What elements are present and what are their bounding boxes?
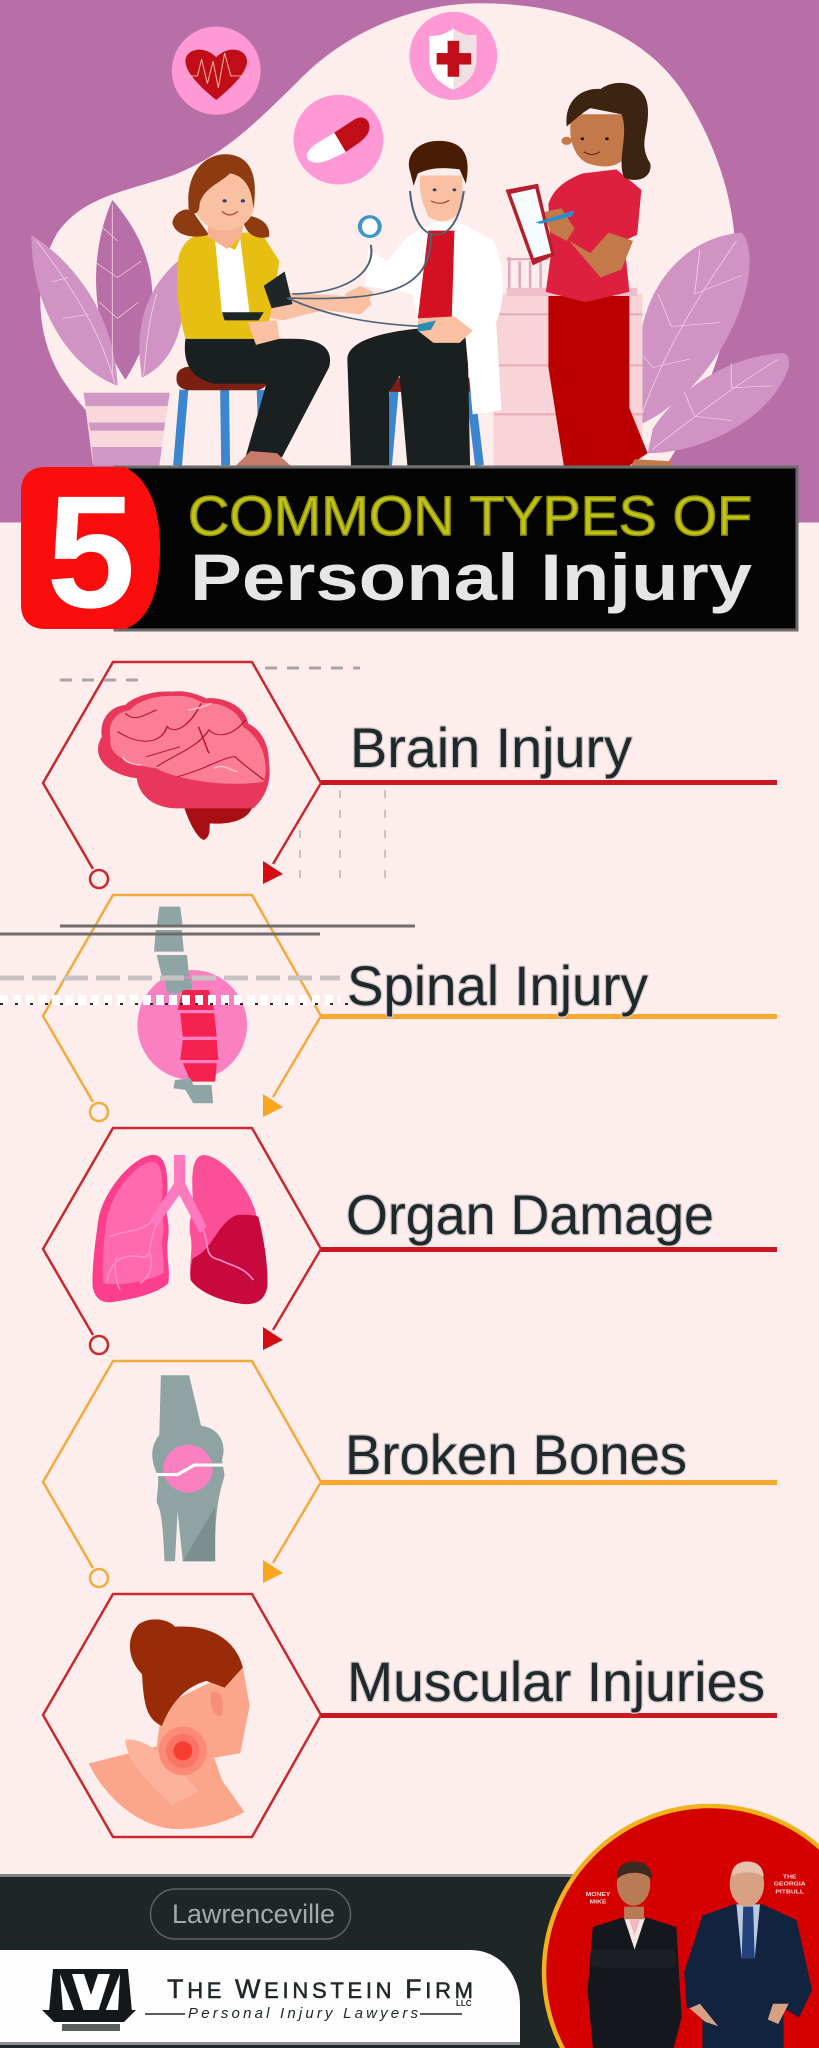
label: Organ Damage: Organ Damage [346,1183,714,1246]
icon: doctor stool [384,378,479,465]
panel: footer band [0,1806,819,2048]
icon: cabinet with test tubes [494,257,642,469]
title line 2: Personal Injury [190,540,752,614]
panel: attorneys circle [544,1806,819,2048]
nurse figure [506,83,671,469]
label: Brain Injury: Brain Injury [350,716,632,779]
panel: hero illustration [0,0,819,522]
icon: lungs [92,1155,267,1304]
firm name: THE WEINSTEIN FIRM [167,1974,473,2004]
icon: brain [98,691,270,840]
icon: spine [137,907,247,1103]
panel: item 1 brain injury [43,662,777,888]
panel: item 3 organ damage [43,1128,777,1354]
attorney right: PITBULL [775,1889,804,1895]
icon: knee bone [152,1375,225,1561]
llc mark: LLC [456,1999,472,2008]
panel: item 5 muscular injuries [43,1594,777,1837]
firm tagline: Personal Injury Lawyers [188,2005,418,2022]
red number badge: 5 [47,462,135,641]
icon: scales logo [42,1969,136,2031]
red number badge [21,462,160,641]
title line 1: COMMON TYPES OF [188,484,752,547]
icon: shield badge [409,12,497,100]
label: Muscular Injuries: Muscular Injuries [347,1650,765,1713]
icon: potted plant [31,200,185,465]
label: Broken Bones: Broken Bones [345,1423,687,1486]
attorney right [684,1861,812,2048]
icon: heart badge [172,27,261,115]
attorney right: THE [783,1874,796,1880]
icon: patient stool [177,367,268,465]
logo plate [0,1950,520,2045]
label: Spinal Injury: Spinal Injury [347,954,648,1017]
attorney right: GEORGIA [774,1881,806,1887]
panel: title banner [21,462,797,641]
icon: back-right plant leaves [638,233,789,453]
location pill [150,1889,350,1939]
black title box [115,467,797,630]
location pill: Lawrenceville [172,1899,335,1929]
patient figure [172,154,372,467]
icon: pill badge [294,95,383,185]
doctor figure [287,141,503,465]
attorney left: MIKE [590,1899,607,1905]
attorney left [586,1861,682,2048]
panel: item 4 broken bones [43,1361,777,1587]
panel: item 2 spinal injury [43,895,777,1121]
icon: neck pain head [89,1619,250,1829]
attorney left: MONEY [586,1892,611,1898]
